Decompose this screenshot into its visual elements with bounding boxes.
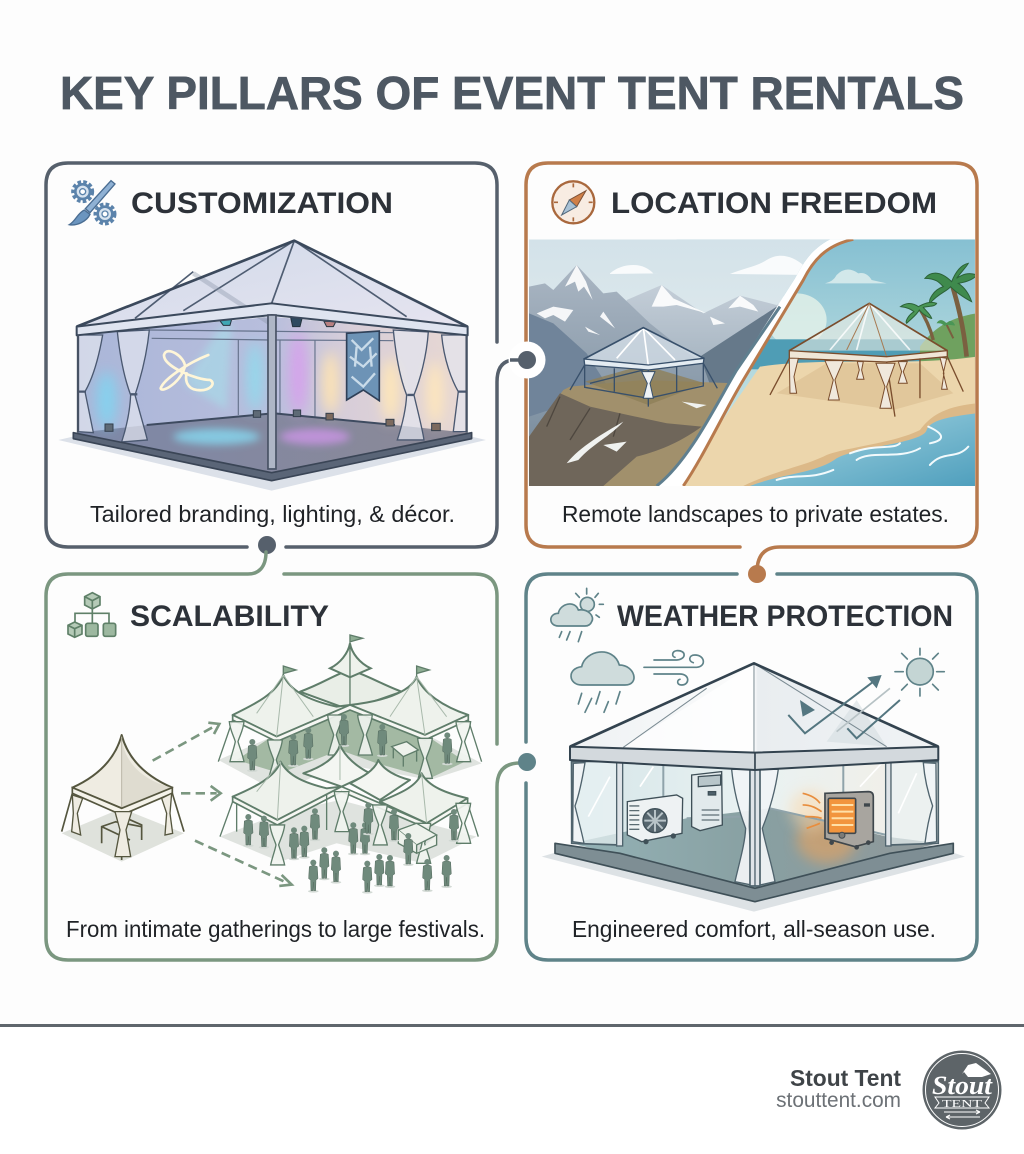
wall panels glass bbox=[572, 761, 938, 845]
neon logo bbox=[161, 351, 213, 390]
logo badge: TENT bbox=[942, 1098, 982, 1110]
illustration: climate controlled tent bbox=[542, 648, 965, 912]
connector dots bbox=[518, 565, 766, 771]
dashed growth arrows bbox=[153, 726, 287, 883]
rain cloud bbox=[571, 652, 634, 712]
logo badge: Stout bbox=[932, 1071, 993, 1100]
panel: weather protection bbox=[518, 565, 977, 960]
roof bbox=[570, 663, 938, 753]
deflected sun rays bbox=[788, 682, 900, 738]
panel: location freedom bbox=[508, 163, 977, 572]
roof bbox=[77, 241, 468, 327]
poles bbox=[750, 769, 760, 886]
sun bbox=[895, 648, 944, 696]
outdoor AC unit bbox=[627, 795, 683, 844]
icon: cloud, sun and rain bbox=[551, 588, 603, 642]
icon: gears and paintbrush bbox=[69, 181, 115, 225]
website: stouttent.com bbox=[776, 1089, 901, 1112]
illustration: small tent scaling to large tent village bbox=[62, 635, 482, 894]
caption: location freedom: Remote landscapes to private estates. bbox=[562, 501, 949, 527]
heading: weather protection: WEATHER PROTECTION bbox=[617, 600, 953, 633]
mountain tent bbox=[586, 369, 704, 404]
logo badge bbox=[922, 1050, 1002, 1130]
divider white band bbox=[676, 240, 846, 486]
icon: scaling cubes bbox=[68, 593, 116, 637]
icon: compass bbox=[552, 181, 594, 223]
beach side bbox=[677, 239, 975, 420]
platform bbox=[73, 433, 472, 481]
illustration: mountain and beach scene bbox=[529, 239, 977, 486]
wind lines bbox=[644, 651, 703, 685]
poles bbox=[268, 315, 276, 469]
panel border: customization bbox=[46, 163, 527, 547]
fixtures bbox=[105, 410, 440, 431]
cliff bbox=[529, 380, 737, 486]
heading: scalability: SCALABILITY bbox=[130, 600, 329, 633]
caption: scalability: From intimate gatherings to large festivals. bbox=[66, 916, 485, 942]
brand name: Stout Tent bbox=[790, 1065, 901, 1091]
top row of tents bbox=[218, 707, 482, 793]
panel: scalability bbox=[46, 552, 520, 960]
caption: weather protection: Engineered comfort, all-season use. bbox=[572, 916, 936, 942]
curtains bbox=[78, 330, 467, 442]
beach tent bbox=[777, 363, 953, 410]
caption: customization: Tailored branding, lighting, & décor. bbox=[90, 501, 455, 527]
connector dot bbox=[258, 536, 276, 554]
mountain side bbox=[529, 239, 846, 486]
small tent bbox=[62, 735, 184, 862]
illustration: branded lit tent bbox=[58, 241, 486, 491]
footer bbox=[0, 1024, 1024, 1154]
title: KEY PILLARS OF EVENT TENT RENTALS bbox=[60, 67, 964, 119]
curtains bbox=[573, 763, 937, 885]
panel border: scalability bbox=[46, 552, 520, 960]
bottom row of tents bbox=[220, 800, 477, 863]
heading: customization: CUSTOMIZATION bbox=[131, 187, 393, 220]
banner bbox=[347, 331, 379, 401]
panel: customization bbox=[46, 163, 527, 554]
panel border: weather protection bbox=[526, 574, 977, 960]
heading: location freedom: LOCATION FREEDOM bbox=[611, 187, 937, 220]
indoor AC tower bbox=[692, 772, 722, 831]
platform bbox=[555, 843, 953, 902]
heater bbox=[803, 792, 873, 850]
connector: halo and dot bbox=[508, 342, 546, 378]
panel border: location freedom bbox=[526, 163, 977, 572]
palm trees bbox=[952, 283, 967, 357]
